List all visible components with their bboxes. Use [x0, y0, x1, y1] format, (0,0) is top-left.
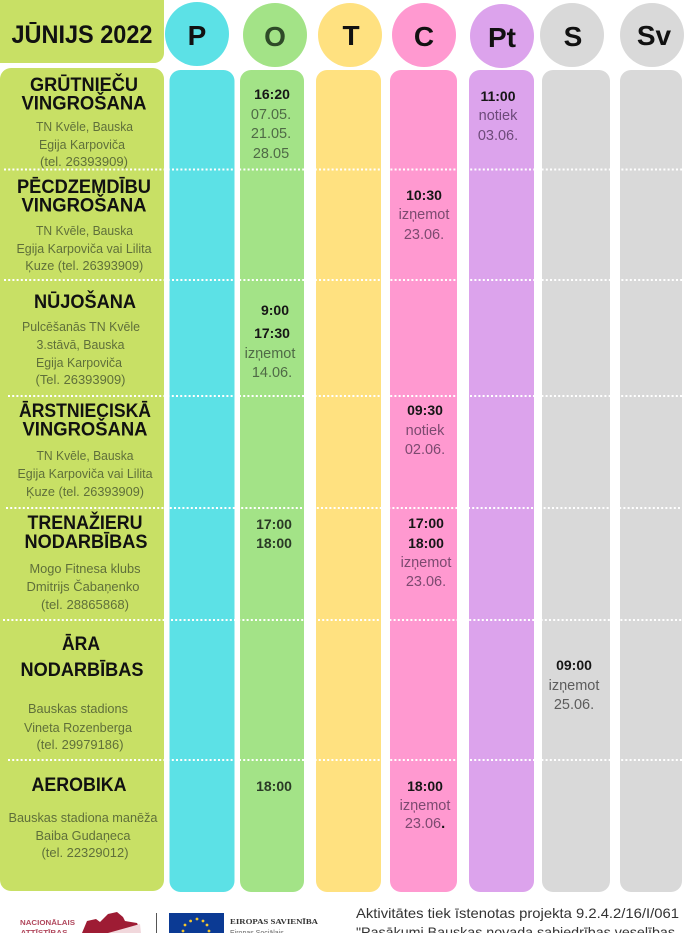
- time: 18:00: 18:00: [407, 778, 443, 794]
- activities panel background: [0, 68, 164, 891]
- Saturday time: 09:00: izņemot: [549, 678, 599, 694]
- activity: Ārstnieciskā vingrošana: TN Kvēle, Bauska: [36, 448, 134, 463]
- activity: Āra nodarbības: [20, 634, 144, 752]
- activity: Ārstnieciskā vingrošana: VINGROŠANA: [22, 418, 148, 440]
- activity: Trenažieru nodarbības: Mogo Fitnesa klubs: [30, 561, 141, 576]
- activity: Grūtnieču vingrošana: [22, 74, 147, 169]
- day: Thursday: C: [414, 21, 434, 52]
- logo: Nacionālais attīstības plāns: NACIONĀLAIS: [20, 918, 75, 927]
- time: 18:00: [400, 778, 450, 832]
- day: Sunday: [620, 3, 684, 67]
- column: Saturday: [542, 70, 610, 892]
- activity: Trenažieru nodarbības: NODARBĪBAS: [24, 532, 148, 553]
- Saturday time: 09:00: [549, 657, 599, 713]
- logo: European Union flag: [169, 913, 224, 933]
- time: 9:00 and 17:30: 9:00: [261, 302, 289, 318]
- activity: Āra nodarbības: Bauskas stadions: [28, 701, 128, 716]
- day: Tuesday: [243, 3, 307, 67]
- column: Monday: [170, 70, 234, 892]
- project note: [356, 905, 679, 933]
- activity: Aerobika: AEROBIKA: [32, 775, 127, 796]
- day: Friday: [470, 4, 534, 68]
- Tuesday times: [245, 86, 295, 794]
- time: 10:30: [399, 187, 449, 243]
- day: Monday: P: [188, 20, 206, 51]
- time: 10:30: 23.06.: [404, 227, 444, 243]
- time: 17:00 and 18:00: [401, 515, 451, 590]
- activity: Āra nodarbības: (tel. 29979186): [36, 737, 124, 752]
- time: 09:30: 09:30: [407, 402, 443, 418]
- time: 17:00 and 18:00: 17:00: [256, 516, 292, 532]
- time: 9:00 and 17:30: izņemot: [245, 346, 295, 362]
- activity: Aerobika: Bauskas stadiona manēža: [8, 810, 158, 825]
- day: Tuesday: O: [264, 21, 286, 52]
- time: 18:00: 23.06.: [405, 816, 445, 832]
- activity: Pēcdzemdību vingrošana: Egija Karpoviča vai Lilita: [16, 241, 152, 256]
- day: Saturday: S: [564, 21, 582, 52]
- activity: Nūjošana: Pulcēšanās TN Kvēle: [22, 319, 140, 334]
- column: Friday: [469, 70, 534, 892]
- Friday time: 11:00: 11:00: [480, 88, 516, 104]
- Saturday time: 09:00: 09:00: [556, 657, 592, 673]
- time: 10:30: 10:30: [406, 187, 442, 203]
- activity: Trenažieru nodarbības: (tel. 28865868): [41, 597, 129, 612]
- day: Monday: [165, 2, 229, 66]
- column: Thursday: [390, 70, 457, 892]
- time: 17:00 and 18:00: izņemot: [401, 555, 451, 571]
- day: Wednesday: [318, 3, 382, 67]
- activity: Pēcdzemdību vingrošana: PĒCDZEMDĪBU: [17, 177, 151, 198]
- activity: Nūjošana: 3.stāvā, Bauska: [36, 337, 125, 352]
- time: 9:00 and 17:30: 17:30: [254, 325, 290, 341]
- day: Wednesday: T: [342, 20, 360, 51]
- column: Sunday: [620, 70, 682, 892]
- Friday time: 11:00: [478, 88, 518, 144]
- time: 16:20: 16:20: [254, 86, 290, 102]
- activity: Trenažieru nodarbības: TRENAŽIERU: [28, 512, 142, 534]
- activity: Ārstnieciskā vingrošana: Ķuze (tel. 26393909): [26, 484, 144, 499]
- activity: Aerobika: (tel. 22329012): [42, 845, 128, 860]
- activity: Nūjošana: [22, 291, 140, 387]
- day: Friday: Pt: [488, 22, 516, 53]
- activity: Grūtnieču vingrošana: Egija Karpoviča: [39, 137, 126, 152]
- activity: Trenažieru nodarbības: [24, 512, 148, 612]
- day: Sunday: Sv: [637, 20, 672, 51]
- time: 09:30: [405, 402, 445, 458]
- activity: Nūjošana: NŪJOŠANA: [34, 291, 136, 313]
- column: Wednesday: [316, 70, 381, 892]
- activity: Āra nodarbības: NODARBĪBAS: [20, 660, 144, 681]
- time: 16:20: [251, 86, 291, 162]
- Saturday time: 09:00: 25.06.: [554, 697, 594, 713]
- activity: Grūtnieču vingrošana: GRŪTNIEČU: [30, 74, 138, 96]
- project note: Aktivitātes tiek īstenotas projekta 9.2.4.2/16/I/061: [356, 905, 679, 921]
- time: 17:00 and 18:00: 17:00: [408, 515, 444, 531]
- logo divider: [156, 913, 157, 933]
- activity: Aerobika: Baiba Gudaņeca: [36, 828, 131, 843]
- activity: Nūjošana: (Tel. 26393909): [36, 372, 126, 387]
- activity: Pēcdzemdību vingrošana: [16, 177, 152, 273]
- time: 18:00: 18:00: [256, 778, 292, 794]
- activity: Grūtnieču vingrošana: (tel. 26393909): [40, 154, 128, 169]
- activity: Ārstnieciskā vingrošana: ĀRSTNIECISKĀ: [19, 401, 151, 422]
- activity: Ārstnieciskā vingrošana: [18, 401, 153, 499]
- Thursday times: [399, 187, 451, 832]
- Friday time: 11:00: notiek: [479, 108, 518, 124]
- time: 16:20: 28.05: [253, 146, 289, 162]
- time: 9:00 and 17:30: 14.06.: [252, 365, 292, 381]
- day: Thursday: [392, 3, 456, 67]
- activity: Nūjošana: Egija Karpoviča: [36, 355, 123, 370]
- activity: Trenažieru nodarbības: Dmitrijs Čabaņenko: [26, 579, 140, 594]
- activity: Pēcdzemdību vingrošana: TN Kvēle, Bauska: [36, 223, 134, 238]
- column: Tuesday: [240, 70, 304, 892]
- month header panel: [0, 0, 164, 63]
- time: 10:30: izņemot: [399, 207, 449, 223]
- activity: Ārstnieciskā vingrošana: Egija Karpoviča vai Lilita: [18, 466, 153, 481]
- time: 16:20: 21.05.: [251, 126, 291, 142]
- day circles: [165, 2, 684, 68]
- activity: Grūtnieču vingrošana: TN Kvēle, Bauska: [36, 119, 134, 134]
- logo: Eiropas Savienība text: [230, 917, 319, 933]
- Friday time: 11:00: 03.06.: [478, 128, 518, 144]
- time: 17:00 and 18:00: 18:00: [408, 535, 444, 551]
- time: 9:00 and 17:30: [245, 302, 295, 381]
- day: Saturday: [540, 3, 604, 67]
- time: 17:00 and 18:00: 18:00: [256, 535, 292, 551]
- activity: Aerobika: [8, 775, 158, 860]
- activity: Āra nodarbības: Vineta Rozenberga: [24, 720, 133, 735]
- activity: Āra nodarbības: ĀRA: [62, 634, 100, 655]
- time: 17:00 and 18:00: 23.06.: [406, 574, 446, 590]
- time: 17:00 and 18:00: [256, 516, 292, 551]
- time: 09:30: notiek: [406, 423, 445, 439]
- logo: Eiropas Savienība text: EIROPAS SAVIENĪBA: [230, 917, 319, 926]
- activity: Pēcdzemdību vingrošana: Ķuze (tel. 26393909): [25, 258, 143, 273]
- logo: Nacionālais attīstības plāns: [20, 912, 141, 933]
- activity: Pēcdzemdību vingrošana: VINGROŠANA: [22, 194, 147, 216]
- month title: JŪNIJS 2022: [12, 21, 152, 49]
- time: 09:30: 02.06.: [405, 442, 445, 458]
- activity: Grūtnieču vingrošana: VINGROŠANA: [22, 92, 147, 114]
- time: 18:00: izņemot: [400, 798, 450, 814]
- time: 16:20: 07.05.: [251, 107, 291, 123]
